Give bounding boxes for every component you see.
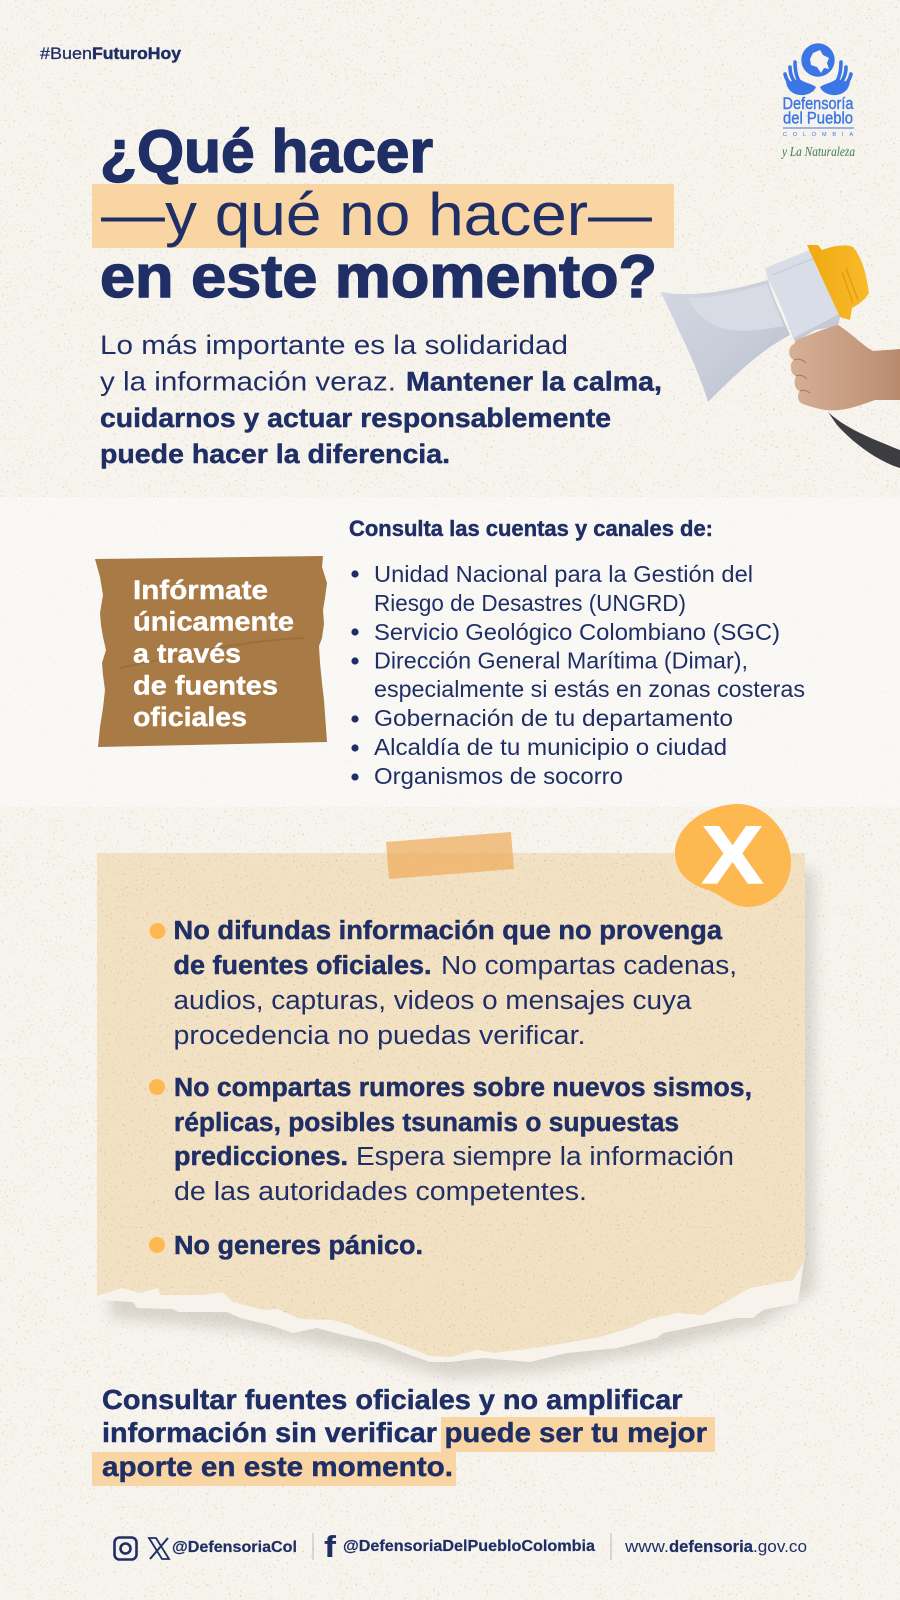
item 2: No compartas rumores sobre nuevos sismos, bbox=[174, 1074, 752, 1102]
tape strip bbox=[386, 832, 514, 879]
intro paragraph: Lo más importante es la solidaridad bbox=[100, 330, 568, 360]
closing highlights bbox=[92, 1417, 715, 1486]
torn white paper edge bbox=[97, 1255, 805, 1362]
tape label bbox=[133, 575, 294, 732]
item 1: No compartas cadenas, bbox=[441, 952, 737, 980]
closing message: Consultar fuentes oficiales y no amplificar bbox=[102, 1384, 683, 1415]
note paper bbox=[97, 853, 805, 1358]
paper shadow bbox=[110, 870, 815, 1378]
icon: X badge bbox=[675, 804, 791, 907]
list of official channels: Gobernación de tu departamento bbox=[374, 705, 733, 731]
body bbox=[765, 250, 841, 338]
title highlight bbox=[92, 184, 674, 248]
icon: megaphone held by hand bbox=[661, 245, 900, 468]
closing message bbox=[92, 1384, 715, 1486]
item 1: de fuentes oficiales. bbox=[174, 952, 432, 980]
list of official channels: Servicio Geológico Colombiano (SGC) bbox=[374, 619, 780, 645]
item 1: No difundas información que no provenga bbox=[174, 917, 723, 945]
title: en este momento? bbox=[100, 243, 657, 310]
website: www. bbox=[624, 1537, 669, 1556]
item 2: Espera siempre la información bbox=[356, 1143, 734, 1171]
logo: Defensoría del Pueblo: y La Naturaleza bbox=[780, 145, 855, 160]
handle X and Instagram: @DefensoriaCol bbox=[172, 1539, 297, 1556]
hand bbox=[789, 325, 900, 410]
hashtag: #Buen bbox=[40, 45, 92, 63]
torn brown tape bbox=[95, 556, 327, 747]
logo: Defensoría del Pueblo: COLOMBIA bbox=[783, 132, 853, 138]
website: defensoria bbox=[669, 1537, 754, 1556]
item 2 bbox=[149, 1074, 752, 1206]
hashtag bbox=[40, 45, 182, 63]
item 1 bbox=[150, 917, 737, 1050]
icon: X badge: X bbox=[702, 810, 763, 901]
yellow cap bbox=[807, 245, 869, 320]
item 2: predicciones. bbox=[174, 1143, 348, 1171]
item 2: réplicas, posibles tsunamis o supuestas bbox=[174, 1109, 679, 1137]
intro paragraph: Mantener la calma, bbox=[406, 366, 662, 396]
item 3: No generes pánico. bbox=[174, 1232, 423, 1260]
list of official channels: Organismos de socorro bbox=[374, 763, 623, 789]
list of official channels: especialmente si estás en zonas costeras bbox=[374, 676, 805, 702]
logo: Defensoría del Pueblo: Defensoría bbox=[782, 95, 854, 113]
item 2: de las autoridades competentes. bbox=[174, 1178, 587, 1206]
hashtag: FuturoHoy bbox=[92, 45, 182, 63]
icon: globe with Colombia map and hands bbox=[785, 43, 851, 95]
icon: facebook: f bbox=[324, 1529, 337, 1564]
tape label: Infórmate bbox=[133, 575, 268, 605]
list heading: Consulta las cuentas y canales de: bbox=[349, 516, 713, 541]
footer social links bbox=[114, 1529, 807, 1564]
list of official channels bbox=[351, 561, 805, 789]
closing message: aporte en este momento. bbox=[102, 1451, 453, 1482]
closing message: puede ser tu mejor bbox=[444, 1417, 707, 1448]
tape label: a través bbox=[133, 638, 241, 668]
website: .gov.co bbox=[753, 1537, 807, 1556]
icon: instagram bbox=[114, 1538, 136, 1560]
tape label: únicamente bbox=[133, 606, 294, 636]
handle Facebook: @DefensoriaDelPuebloColombia bbox=[343, 1538, 595, 1555]
tape label: oficiales bbox=[133, 702, 247, 732]
tape label: de fuentes bbox=[133, 670, 278, 700]
list of official channels: Alcaldía de tu municipio o ciudad bbox=[374, 734, 727, 760]
list of official channels: Dirección General Marítima (Dimar), bbox=[374, 648, 748, 674]
intro paragraph: y la información veraz. bbox=[100, 366, 396, 396]
strap bbox=[828, 412, 900, 468]
panel: what not to do note bbox=[97, 804, 815, 1378]
logo: Defensoría del Pueblo: del Pueblo bbox=[783, 110, 853, 128]
intro paragraph: cuidarnos y actuar responsablemente bbox=[100, 403, 611, 433]
list of official channels: Unidad Nacional para la Gestión del bbox=[374, 561, 753, 587]
title: ¿Qué hacer bbox=[100, 118, 433, 185]
list of official channels: Riesgo de Desastres (UNGRD) bbox=[374, 590, 686, 616]
item 1: audios, capturas, videos o mensajes cuya bbox=[174, 987, 692, 1015]
logo: Defensoría del Pueblo bbox=[780, 43, 855, 160]
title: —y qué no hacer— bbox=[101, 181, 652, 248]
title bbox=[92, 118, 674, 310]
website bbox=[624, 1537, 807, 1556]
closing message: información sin verificar bbox=[102, 1417, 437, 1448]
panel: official sources bbox=[95, 516, 805, 789]
icon: X logo bbox=[149, 1538, 169, 1559]
horn bbox=[661, 280, 790, 402]
item 1: procedencia no puedas verificar. bbox=[174, 1022, 586, 1050]
intro paragraph: puede hacer la diferencia. bbox=[100, 439, 450, 469]
intro paragraph bbox=[100, 330, 662, 469]
